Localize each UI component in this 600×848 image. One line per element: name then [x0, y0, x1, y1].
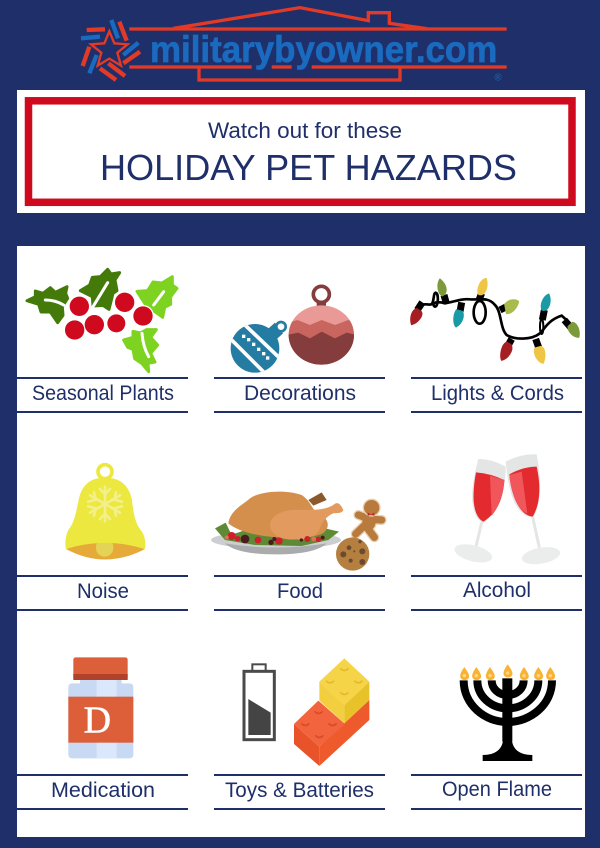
hazard: Open Flame [411, 664, 582, 809]
icon: holly [27, 269, 177, 372]
logo star emblem [81, 20, 140, 80]
icon: ornaments [230, 286, 357, 375]
label: Alcohol [463, 579, 531, 602]
subtitle: Watch out for these [208, 118, 402, 143]
hazard: Lights & Cords [411, 279, 582, 412]
icon: battery and toy bricks [244, 658, 369, 766]
rules [214, 378, 385, 412]
label: Noise [77, 580, 129, 603]
hazard: Alcohol [411, 454, 582, 610]
logo house outline [129, 8, 507, 80]
rules [411, 576, 582, 610]
panel: title banner [17, 90, 585, 213]
rules [214, 775, 385, 809]
hazard: Food [211, 492, 385, 610]
label: Lights & Cords [431, 382, 564, 405]
icon: wine glasses [453, 454, 561, 567]
icon: string lights [411, 279, 579, 363]
red frame [28, 101, 572, 202]
label: Food [277, 580, 323, 603]
title: HOLIDAY PET HAZARDS [100, 147, 517, 188]
label: Open Flame [442, 778, 552, 801]
top rule [17, 378, 188, 412]
logo wordmark: militarybyowner.com [150, 29, 497, 70]
rules [411, 378, 582, 412]
label: Seasonal Plants [32, 382, 174, 405]
rules [17, 576, 188, 610]
logo: militarybyowner.com [81, 8, 507, 84]
rules [17, 775, 188, 809]
rules [411, 775, 582, 809]
icon: menorah [460, 664, 555, 761]
icon: pill bottle: D [84, 700, 111, 742]
label: Decorations [244, 382, 356, 405]
registered mark: ® [494, 73, 502, 84]
icon: pill bottle [68, 657, 133, 758]
hazard: Seasonal Plants [17, 269, 188, 412]
hazard: Noise [17, 465, 188, 610]
hazard: Medication [17, 657, 188, 809]
hazard: Decorations [214, 286, 385, 412]
icon: turkey and cookies [211, 492, 382, 571]
label: Toys & Batteries [225, 779, 374, 802]
rules [214, 576, 385, 610]
panel: hazards grid [17, 246, 585, 837]
icon: bell [65, 465, 145, 559]
hazard: Toys & Batteries [214, 658, 385, 809]
label: Medication [51, 779, 155, 802]
